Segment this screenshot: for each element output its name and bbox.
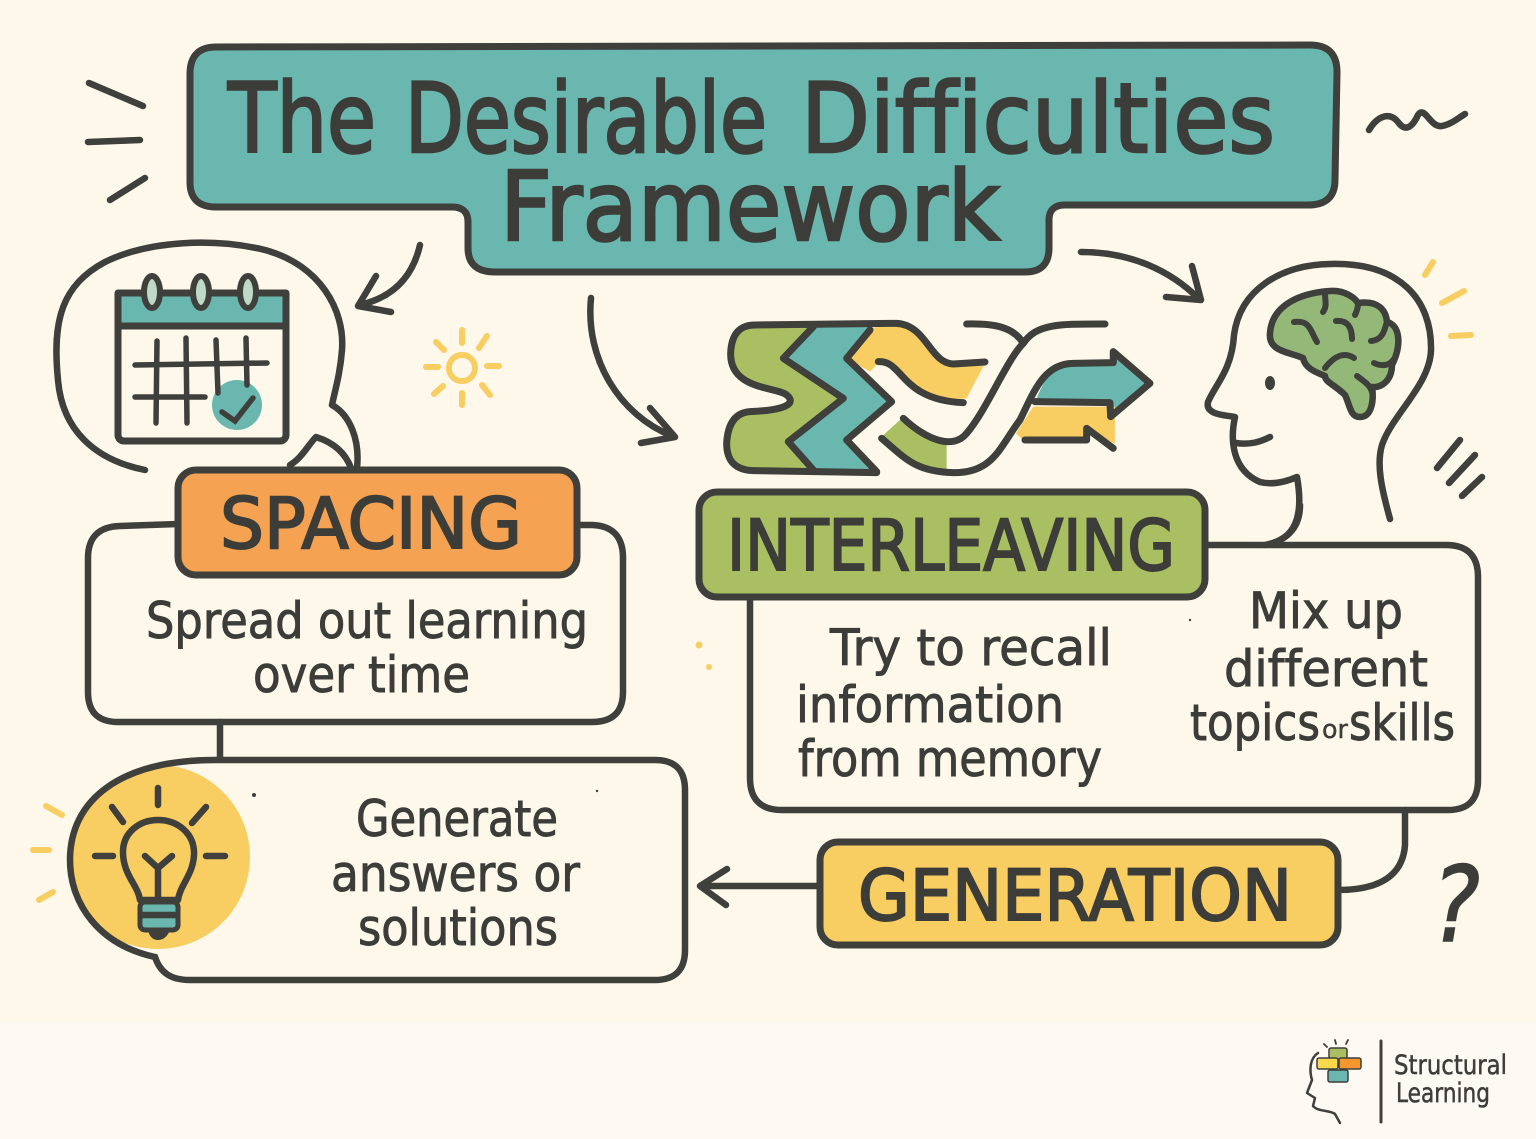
- arrow to spacing: [358, 245, 420, 312]
- interleaving description: or: [1322, 715, 1348, 745]
- panel: interleaving: [699, 492, 1478, 810]
- squiggle right of title: [1369, 112, 1465, 130]
- icon: brain: [1270, 291, 1398, 417]
- spacing description: [146, 592, 588, 704]
- interleaving description: different: [1224, 640, 1428, 698]
- logo: Structural Learning: [1307, 1040, 1507, 1123]
- generation label: GENERATION: [858, 855, 1292, 937]
- interleaving description: topics: [1190, 694, 1320, 752]
- arrow to interleaving: [590, 298, 675, 443]
- title banner: Desirable: [405, 63, 767, 175]
- connector from interleaving to generation: [1338, 810, 1405, 890]
- generation description: answers or: [331, 845, 580, 903]
- logo icon: [1307, 1040, 1361, 1123]
- yellow sparks by head: [1425, 262, 1471, 336]
- yellow sparks by bulb: [33, 806, 62, 900]
- logo wordmark: Learning: [1396, 1078, 1490, 1109]
- spacing label: SPACING: [220, 483, 522, 565]
- retrieval description: from memory: [798, 730, 1102, 788]
- title banner: [190, 45, 1337, 272]
- icon: interleaving ribbons: [727, 323, 1152, 473]
- logo wordmark: [1394, 1050, 1507, 1109]
- interleaving description: [1190, 582, 1455, 752]
- icon: sun: [426, 330, 499, 405]
- spacing description: Spread out learning: [146, 592, 588, 650]
- logo wordmark: Structural: [1394, 1050, 1507, 1081]
- decorative dashes left of title: [88, 83, 145, 200]
- retrieval description: Try to recall: [829, 619, 1112, 677]
- panel: spacing: [88, 470, 623, 722]
- interleaving label: INTERLEAVING: [727, 505, 1175, 587]
- title banner: Difficulties: [801, 63, 1275, 175]
- connector: [217, 722, 223, 760]
- generation description: [331, 790, 580, 957]
- title banner: Framework: [500, 151, 1000, 263]
- icon: head with brain: [1208, 264, 1431, 540]
- arrow to generate box: [700, 869, 820, 905]
- spacing label: [178, 470, 577, 575]
- interleaving description: skills: [1349, 694, 1455, 752]
- icon: speech bubble with calendar: [56, 243, 358, 470]
- retrieval description: information: [796, 676, 1064, 734]
- neck connector overlap: [1265, 505, 1300, 545]
- spacing description: over time: [253, 646, 470, 704]
- yellow dots: [696, 642, 712, 670]
- grey dashes by head: [1437, 440, 1482, 496]
- retrieval description: [796, 619, 1112, 788]
- generation label: [820, 842, 1338, 945]
- specks: [252, 619, 1191, 797]
- icon: calendar: [118, 276, 286, 441]
- generation description: Generate: [356, 790, 558, 848]
- generation description: solutions: [358, 899, 558, 957]
- title banner: The: [227, 63, 376, 175]
- icon: light bulb: [66, 765, 250, 949]
- panel: generation answers: [66, 760, 685, 980]
- arrow to brain: [1081, 252, 1201, 300]
- interleaving description: Mix up: [1249, 582, 1403, 640]
- question mark: ?: [1432, 844, 1480, 966]
